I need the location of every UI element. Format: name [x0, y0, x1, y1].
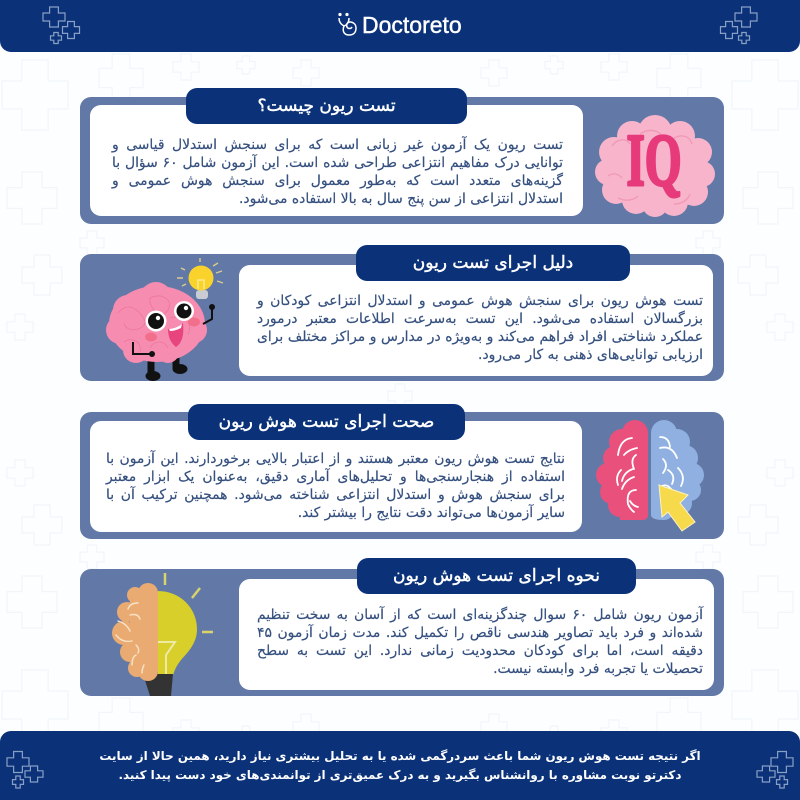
header crosses left [42, 6, 80, 44]
text box: what is Raven test [90, 105, 583, 216]
bulb filament [158, 642, 175, 674]
bulb half [158, 591, 197, 675]
body text: what is Raven test: گزینه‌های متعدد است که به‌طور معمول برای سنجش هوش عمومی و [112, 173, 563, 189]
body text: how to run: شده‌اند و فرد باید تصاویر هندسی ناقص را تکمیل کند. مدت زمان آزمون ۴۵ [257, 625, 703, 641]
text box: how to run [239, 579, 714, 690]
heading: why run the test: دلیل اجرای تست ریون [413, 253, 573, 273]
body text: what is Raven test: تست ریون یک آزمون غیر زبانی است که برای سنجش استدلال قیاسی و [112, 137, 563, 153]
body text: why run the test [256, 293, 703, 363]
footer call to action text: دکترتو نوبت مشاوره با روانشناس بگیرید و به درک عمیق‌تری از توانمندی‌های خود دست پیدا کنید. [119, 768, 681, 782]
IQ letters: IQ [627, 120, 681, 202]
icon: cartoon brain with light bulb [106, 258, 224, 381]
footer call to action text [99, 749, 701, 782]
light bulb [177, 258, 223, 299]
logo wordmark: Doctoreto [362, 12, 462, 38]
footer bar [0, 731, 800, 800]
eyes [146, 301, 194, 332]
body text: why run the test: بزرگسالان استفاده می‌شود. این تست به‌سرعت اطلاعات معتبر درمورد [257, 311, 703, 327]
yellow cursor arrow [659, 485, 695, 531]
body text: how to run [257, 606, 704, 677]
footer call to action text: اگر نتیجه تست هوش ریون شما باعث سردرگمی شده یا به تحلیل بیشتری نیاز دارید، همین حالا از سایت [99, 749, 701, 763]
panel: what is Raven test [80, 97, 724, 224]
footer crosses left [6, 750, 44, 789]
arms [133, 307, 212, 354]
body text: why run the test: عملکرد شناختی افراد فراهم می‌کند و به‌ویژه در مدارس و مراکز مختلف برای [257, 329, 703, 345]
body text: how to run: دقیقه است، اما برای کودکان محدودیت زمانی ندارد. این تست به سطح [257, 643, 703, 659]
text box: why run the test [239, 265, 713, 376]
body text: validity: برای سنجش هوش و استدلال انتزاعی شناخته می‌شود. همچنین ترکیب آن با [106, 487, 565, 503]
logo: stethoscope icon [338, 12, 357, 36]
body text: how to run: آزمون ریون شامل ۶۰ سوال چندگزینه‌ای است که از آسان به سخت تنظیم [257, 607, 703, 623]
body text: why run the test: تست هوش ریون برای سنجش هوش عمومی و استدلال انتزاعی کودکان و [257, 293, 703, 309]
body text: what is Raven test [111, 136, 564, 207]
body text: validity: سایر آزمون‌ها می‌تواند دقت نتایج را بیشتر کند. [298, 505, 565, 521]
header crosses right [720, 6, 758, 44]
text box: validity [90, 421, 582, 532]
bulb base [143, 674, 173, 696]
heading: how to run: نحوه اجرای تست هوش ریون [393, 566, 600, 586]
icon: IQ brain [595, 115, 715, 217]
heading: how to run [357, 558, 636, 594]
body text: what is Raven test: استدلال انتزاعی از سن پنج سال به بالا استفاده می‌شود. [239, 191, 563, 207]
bulb rays [165, 573, 213, 632]
panel: validity [80, 412, 724, 539]
icon: half brain half light bulb [112, 573, 213, 696]
legs [151, 356, 176, 374]
body text: validity: نتایج تست هوش ریون معتبر هستند و از اعتبار بالایی برخوردارند. این آزمون با [106, 451, 565, 467]
body text: why run the test: ارزیابی توانایی‌های ذهنی به کار می‌رود. [478, 347, 703, 363]
body text: what is Raven test: توانایی درک مفاهیم انتزاعی طراحی شده است. این آزمون شامل ۶۰ سؤال با [112, 155, 563, 171]
panel: why run the test [80, 254, 724, 381]
body text: how to run: تحصیلات یا تجربه فرد وابسته نیست. [493, 661, 703, 677]
icon: two-colour brain with cursor [596, 420, 704, 532]
heading: validity: صحت اجرای تست هوش ریون [219, 412, 434, 432]
body text: validity [105, 450, 565, 521]
cheeks and mouth [145, 318, 200, 347]
header bar [0, 0, 800, 52]
heading: what is Raven test: تست ریون چیست؟ [257, 96, 396, 116]
heading: why run the test [356, 245, 630, 281]
body text: validity: استفاده از هنجارسنجی‌ها و تحلیل‌های آماری دقیق، به‌عنوان یک ابزار معتبر [106, 469, 565, 485]
footer crosses right [756, 750, 794, 789]
heading: what is Raven test [186, 88, 467, 124]
heading: validity [188, 404, 465, 440]
brain half [112, 583, 158, 681]
panel: how to run [80, 569, 724, 696]
